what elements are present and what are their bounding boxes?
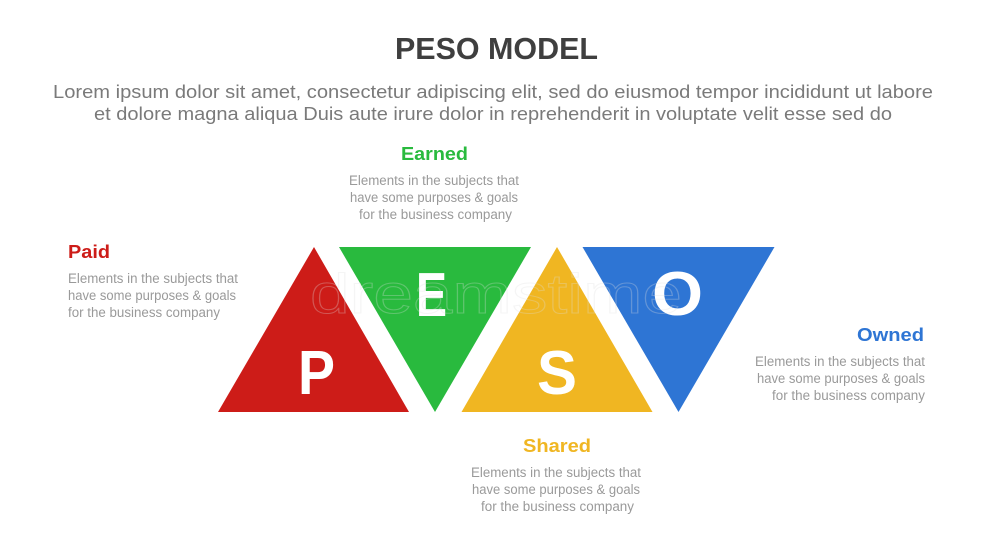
triangle: O (owned): O [652, 260, 703, 329]
text block: Shared: Shared [523, 436, 591, 456]
triangle: P (paid) [218, 247, 409, 412]
triangle: P (paid): P [298, 339, 335, 408]
triangle: E (earned) [339, 247, 531, 412]
subtitle text [53, 81, 933, 124]
subtitle text: Lorem ipsum dolor sit amet, consectetur adipiscing elit, sed do eiusmod tempor incididunt ut labore [53, 81, 933, 102]
text block: Owned [755, 325, 925, 403]
text block: Owned: for the business company [772, 388, 925, 403]
title: PESO MODEL [395, 31, 598, 66]
text block: Paid [68, 242, 238, 320]
text block: Paid: Elements in the subjects that [68, 271, 238, 286]
text block: Earned: have some purposes & goals [350, 190, 518, 205]
text block: Shared: have some purposes & goals [472, 482, 640, 497]
text block: Owned: Owned [857, 325, 924, 345]
subtitle text: et dolore magna aliqua Duis aute irure dolor in reprehenderit in voluptate velit esse sed do [94, 103, 892, 124]
text block: Earned [349, 144, 519, 222]
triangle: S (shared) [462, 247, 652, 412]
triangle: O (owned) [582, 247, 774, 412]
text block: Shared [471, 436, 641, 514]
text block: Shared: Elements in the subjects that [471, 465, 641, 480]
text block: Earned: Earned [401, 144, 468, 164]
text block: Earned: for the business company [359, 207, 512, 222]
text block: Shared: for the business company [481, 499, 634, 514]
triangle: E (earned): E [416, 261, 447, 330]
text block: Paid: for the business company [68, 305, 220, 320]
text block: Earned: Elements in the subjects that [349, 173, 519, 188]
text block: Owned: Elements in the subjects that [755, 354, 925, 369]
triangle: S (shared): S [537, 339, 577, 408]
text block: Paid: Paid [68, 242, 110, 262]
watermark: dreamstime [310, 262, 682, 325]
text block: Paid: have some purposes & goals [68, 288, 236, 303]
text block: Owned: have some purposes & goals [757, 371, 925, 386]
